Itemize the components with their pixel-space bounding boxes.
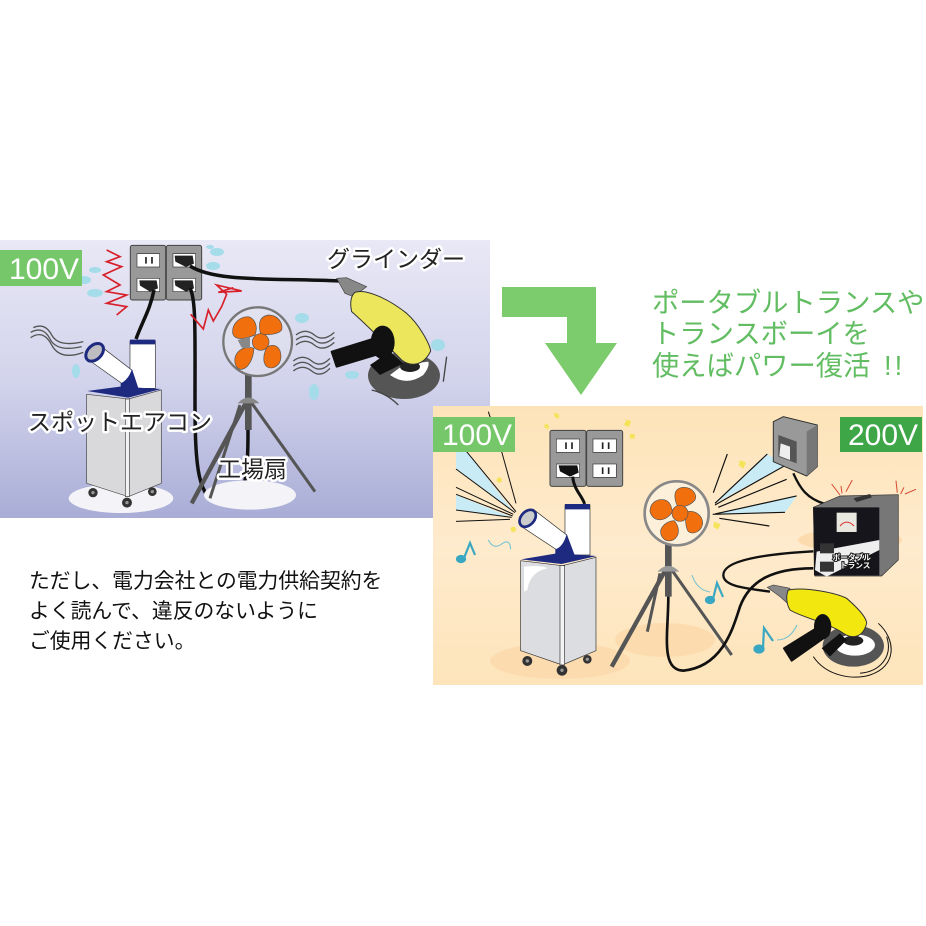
label: grinder: グラインダー bbox=[327, 246, 465, 272]
panel: restored power scene bbox=[433, 406, 923, 685]
air blast lines, 200V side bbox=[713, 454, 797, 530]
panel: 100V overloaded scene bbox=[0, 240, 490, 518]
music notes, right bbox=[457, 543, 797, 652]
wall outlets, left bbox=[130, 245, 202, 300]
factory fan, right bbox=[612, 481, 813, 671]
200V breaker box bbox=[773, 417, 825, 504]
heading: green message: 使えばパワー復活 bbox=[652, 350, 870, 381]
heading: green message: トランスボーイを bbox=[652, 318, 870, 349]
red overload sparks bbox=[103, 250, 242, 329]
note text: よく読んで、違反のないように bbox=[29, 600, 318, 623]
factory fan, left bbox=[192, 307, 334, 510]
grinder, right bbox=[767, 585, 891, 677]
note text: ただし、電力会社との電力供給契約を bbox=[29, 570, 382, 593]
badge: 100V right: 100V bbox=[442, 419, 512, 452]
grinder, left bbox=[332, 278, 447, 405]
spot air conditioner, left bbox=[31, 326, 173, 513]
badge: 100V left: 100V bbox=[9, 253, 79, 286]
air blast lines, 100V side bbox=[456, 412, 516, 521]
spot air conditioner, right bbox=[488, 504, 597, 676]
arrow: green bent arrow bbox=[502, 287, 617, 395]
note text bbox=[29, 570, 382, 653]
label: spot air conditioner: スポットエアコン bbox=[28, 409, 212, 435]
wall outlets, right bbox=[497, 413, 635, 532]
heading: green message: !! bbox=[884, 350, 905, 381]
floor shadows bbox=[490, 529, 902, 679]
heading: green message bbox=[652, 287, 924, 381]
portable transformer: ポータブル bbox=[833, 552, 871, 562]
heading: green message: ポータブルトランスや bbox=[652, 287, 924, 318]
portable transformer bbox=[723, 480, 916, 592]
water drops, left bbox=[72, 245, 445, 400]
power cords, left bbox=[136, 266, 340, 504]
portable transformer: トランス bbox=[840, 561, 871, 570]
label: factory fan: 工場扇 bbox=[218, 456, 287, 482]
note text: ご使用ください。 bbox=[29, 630, 195, 653]
badge: 200V: 200V bbox=[848, 419, 918, 452]
